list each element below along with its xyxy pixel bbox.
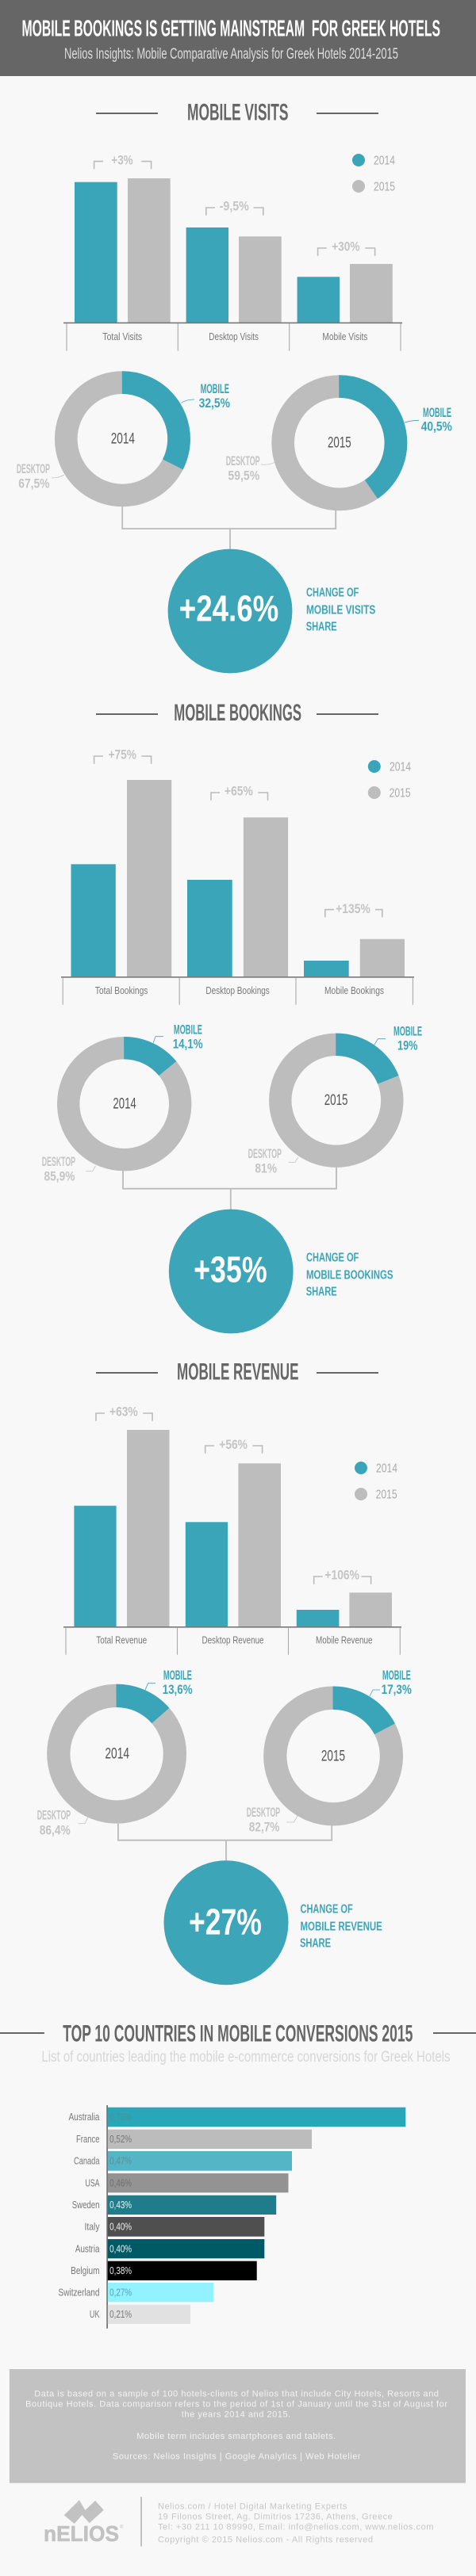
legend: revenue: 2014 [376, 1462, 397, 1476]
callout: visits change: CHANGE OF [306, 586, 359, 599]
callout: visits change: +24.6% [179, 587, 278, 629]
header banner [0, 0, 476, 76]
donut: bookings 2014: 2014 [113, 1095, 136, 1112]
row: Australia [68, 2108, 405, 2127]
callout: bookings change: SHARE [306, 1286, 337, 1299]
connector: bookings [123, 1168, 336, 1210]
donut: bookings 2015 [248, 1024, 422, 1176]
panel: methodology note: Sources: Nelios Insights | Google Analytics | Web Hotelier [113, 2452, 361, 2462]
bar chart: revenue: +56% [219, 1437, 248, 1452]
row: Austria: 0,40% [109, 2242, 132, 2254]
callout: revenue change: CHANGE OF [300, 1902, 353, 1916]
row: France [76, 2130, 312, 2149]
bar chart: revenue: Total Revenue [96, 1634, 147, 1646]
footer contact text: 19 Filonos Street, Ag. Dimitrios 17236, Athens, Greece [158, 2513, 393, 2522]
donut: visits 2015: 40,5% [421, 419, 452, 434]
row: Switzerland: 0,27% [109, 2286, 132, 2298]
panel: methodology note: Data is based on a sample of 100 hotels-clients of Nelios that include City Hotels, Resorts and [34, 2390, 439, 2399]
panel: methodology note: the years 2014 and 2015. [182, 2410, 290, 2420]
donut: revenue 2015: MOBILE [382, 1668, 411, 1683]
donut: bookings 2015: 19% [397, 1038, 417, 1053]
row: Belgium [71, 2261, 257, 2280]
heading: mobile revenue: MOBILE REVENUE [177, 1359, 298, 1385]
donut: visits 2015: 59,5% [228, 468, 259, 483]
logo: nelios [44, 2500, 124, 2546]
footer contact text: Tel: +30 211 10 89990, Email: info@nelios.com, www.nelios.com [158, 2523, 433, 2532]
row: Australia: Australia [68, 2111, 100, 2123]
bar chart: bookings [61, 747, 414, 1005]
row: USA: 0,46% [109, 2177, 132, 2188]
donut: visits 2015: DESKTOP [226, 453, 260, 468]
donut: bookings 2015: 2015 [324, 1092, 347, 1109]
bar chart: revenue [63, 1405, 401, 1655]
donut: visits 2014: DESKTOP [17, 461, 50, 476]
row: Switzerland: Switzerland [59, 2286, 100, 2298]
bar chart: visits: -9,5% [220, 199, 249, 214]
donut: visits 2014 [17, 381, 230, 495]
bar chart: bookings: +75% [109, 747, 136, 762]
panel: mobile revenue [37, 1359, 412, 1985]
bar chart: revenue: +63% [109, 1405, 138, 1420]
callout: visits change: MOBILE VISITS [306, 603, 376, 617]
connector: visits [122, 506, 336, 549]
panel: top 10 countries [0, 2021, 476, 2329]
donut: revenue 2014: 13,6% [163, 1682, 193, 1697]
panel: methodology note: Mobile term includes smartphones and tablets. [136, 2432, 336, 2441]
row: Sweden: 0,43% [109, 2199, 132, 2211]
row: Italy: 0,40% [109, 2220, 132, 2232]
donut: visits 2015 [226, 387, 452, 499]
bar chart: visits: Mobile Visits [322, 331, 368, 342]
row: USA [86, 2173, 289, 2192]
row: UK [90, 2305, 190, 2324]
donut: visits 2014: 67,5% [18, 476, 49, 491]
footer contact text: Copyright © 2015 Nelios.com - All Rights reserved [158, 2536, 373, 2545]
legend: revenue [355, 1462, 397, 1502]
bar chart: revenue: Desktop Revenue [202, 1634, 263, 1646]
callout: revenue change [163, 1860, 382, 1985]
donut: bookings 2014: DESKTOP [42, 1154, 75, 1169]
heading: mobile bookings: MOBILE BOOKINGS [174, 700, 301, 726]
donut: visits 2014: 32,5% [199, 396, 230, 411]
row: USA: USA [86, 2177, 100, 2188]
donut: bookings 2014: MOBILE [174, 1022, 202, 1038]
bar chart: bookings: Mobile Bookings [324, 984, 384, 996]
donut: revenue 2015: 2015 [321, 1748, 345, 1764]
bar chart: revenue: +106% [324, 1568, 359, 1583]
logo: nelios: nELIOS [44, 2521, 119, 2546]
legend: bookings: 2014 [390, 761, 411, 774]
panel: mobile visits [17, 100, 452, 673]
callout: bookings change: CHANGE OF [306, 1251, 359, 1264]
logo: nelios: ® [120, 2524, 124, 2530]
callout: revenue change: SHARE [300, 1937, 331, 1951]
legend: visits [352, 154, 395, 194]
row: UK: 0,21% [109, 2308, 132, 2320]
donut: visits 2014: 2014 [111, 430, 135, 447]
heading: mobile visits: MOBILE VISITS [187, 100, 289, 126]
bar chart: revenue: Mobile Revenue [316, 1634, 373, 1646]
row: Italy: Italy [84, 2220, 100, 2232]
bar chart: visits: +30% [332, 239, 360, 254]
legend: visits: 2014 [374, 154, 395, 167]
row: Canada [74, 2151, 292, 2171]
callout: revenue change: MOBILE REVENUE [300, 1920, 382, 1933]
legend: revenue: 2015 [376, 1489, 397, 1502]
callout: bookings change: +35% [194, 1249, 267, 1290]
bar chart: visits: Total Visits [102, 331, 142, 342]
donut: visits 2015: MOBILE [423, 405, 451, 420]
callout: revenue change: +27% [189, 1901, 262, 1943]
row: Austria: Austria [75, 2242, 100, 2254]
footer contact text [158, 2502, 433, 2545]
legend: visits: 2015 [374, 181, 395, 194]
connector: revenue [118, 1824, 332, 1860]
panel: methodology note: Boutique Hotels. Data comparison refers to the period of 1st of January until the 31st of August for [25, 2400, 447, 2410]
row: Canada: Canada [74, 2154, 100, 2166]
donut: revenue 2014 [37, 1668, 193, 1838]
bar chart: bookings: +135% [336, 901, 370, 916]
panel: methodology note [10, 2369, 466, 2483]
donut: visits 2014: MOBILE [201, 381, 229, 396]
donut: visits 2015: 2015 [328, 434, 351, 451]
donut: bookings 2014 [42, 1022, 203, 1184]
callout: visits change [168, 549, 376, 673]
footer contact text: Nelios.com / Hotel Digital Marketing Experts [158, 2502, 347, 2512]
callout: bookings change [169, 1210, 393, 1333]
horizontal bar chart [59, 2105, 405, 2329]
row: UK: UK [90, 2308, 100, 2320]
bar chart: visits [63, 152, 402, 351]
donut: revenue 2014: DESKTOP [37, 1808, 71, 1823]
legend: bookings [368, 760, 411, 800]
donut: revenue 2015: 82,7% [249, 1820, 279, 1835]
donut: revenue 2015: 17,3% [382, 1682, 412, 1697]
donut: revenue 2015: DESKTOP [247, 1805, 280, 1820]
panel: mobile bookings [42, 700, 422, 1333]
row: France: 0,52% [109, 2133, 132, 2145]
donut: bookings 2015: 81% [255, 1161, 277, 1176]
footer divider [140, 2497, 142, 2547]
legend: bookings: 2015 [390, 786, 411, 800]
row: Austria [75, 2239, 264, 2258]
donut: revenue 2015 [247, 1668, 412, 1835]
row: Sweden: Sweden [72, 2199, 100, 2211]
donut: bookings 2015: MOBILE [393, 1024, 422, 1039]
donut: revenue 2014: 86,4% [40, 1823, 71, 1838]
row: Belgium: Belgium [71, 2265, 100, 2276]
donut: bookings 2015: DESKTOP [248, 1146, 282, 1161]
bar chart: bookings: Total Bookings [95, 984, 148, 996]
row: Belgium: 0,38% [109, 2265, 132, 2276]
donut: bookings 2014: 14,1% [173, 1037, 203, 1052]
donut: revenue 2014: MOBILE [163, 1668, 192, 1683]
row: Canada: 0,47% [109, 2154, 132, 2166]
row: Sweden [72, 2196, 276, 2215]
row: France: France [76, 2133, 100, 2145]
row: Switzerland [59, 2283, 213, 2302]
row: Australia: 0,76% [109, 2111, 132, 2123]
donut: revenue 2014: 2014 [105, 1745, 129, 1762]
bar chart: bookings: +65% [225, 784, 253, 799]
bar chart: bookings: Desktop Bookings [205, 984, 270, 996]
bar chart: visits: Desktop Visits [209, 331, 259, 342]
donut: bookings 2014: 85,9% [44, 1169, 75, 1184]
callout: visits change: SHARE [306, 621, 337, 634]
bar chart: visits: +3% [111, 152, 133, 167]
callout: bookings change: MOBILE BOOKINGS [306, 1268, 393, 1282]
row: Italy [84, 2217, 264, 2237]
